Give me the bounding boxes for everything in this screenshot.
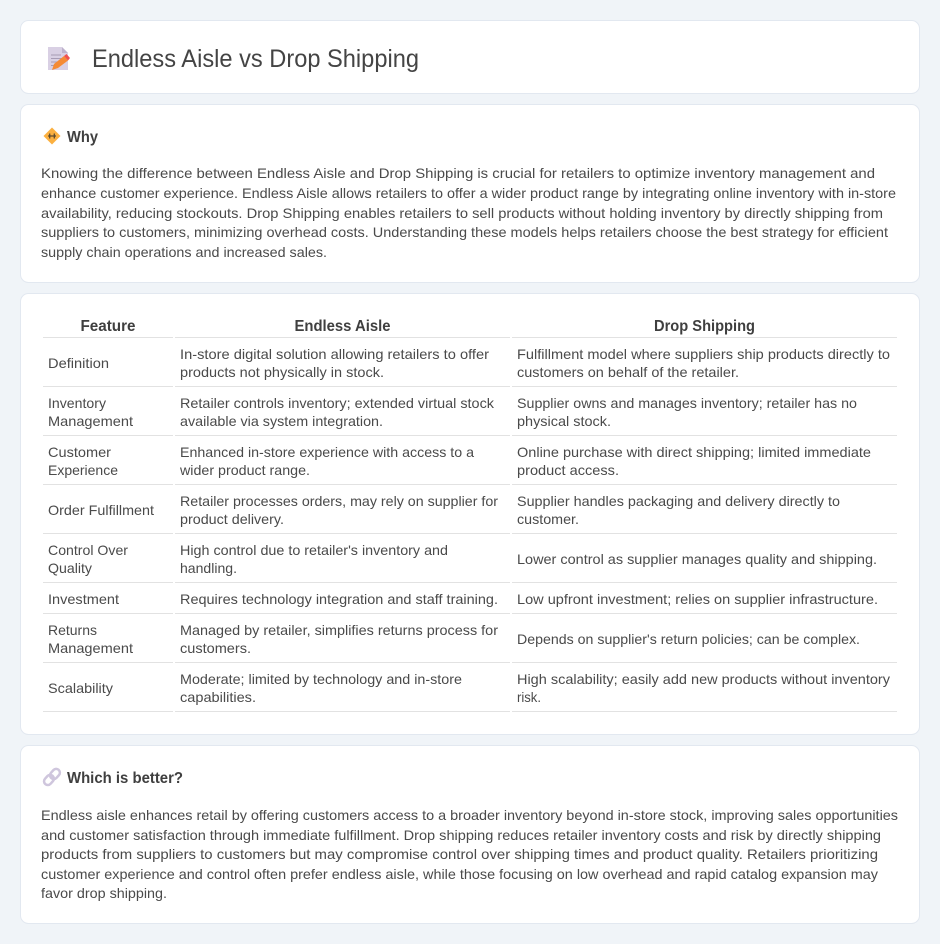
text: which is better paragraph: favor drop shipping. bbox=[41, 885, 167, 901]
icon: warning diamond bbox=[44, 128, 60, 144]
row: returns management: Managed by retailer, simplifies returns process for bbox=[180, 622, 498, 638]
text: why paragraph: supply chain operations and increased sales. bbox=[41, 244, 327, 260]
table header row: Drop Shipping bbox=[654, 318, 755, 335]
text: which is better paragraph: and customer satisfaction through immediate fulfillment. Drop shipping reduces retailer inventory costs and risk by directly shipping bbox=[41, 827, 881, 843]
row: inventory management: Management bbox=[48, 413, 133, 429]
panel: why bbox=[20, 104, 920, 282]
row: investment: Low upfront investment; relies on supplier infrastructure. bbox=[517, 591, 878, 607]
row: inventory management: available via system integration. bbox=[180, 413, 383, 429]
text: why paragraph: Knowing the difference between Endless Aisle and Drop Shipping is crucial for retailers to optimize inventory management and bbox=[41, 165, 875, 181]
panel: comparison table bbox=[20, 294, 920, 734]
text: which is better paragraph: products from suppliers to customers but may compromise control over shipping times and product quality. Retailers prioritizing bbox=[41, 846, 878, 862]
row: investment: Requires technology integration and staff training. bbox=[180, 591, 498, 607]
text: why paragraph: suppliers to customers, minimizing overhead costs. Understanding these models helps retailers choose the best strategy for efficient bbox=[41, 224, 888, 240]
row: inventory management: Inventory bbox=[48, 395, 106, 411]
row: customer experience: Online purchase with direct shipping; limited immediate bbox=[517, 444, 871, 460]
row: returns management bbox=[48, 622, 860, 656]
row: control over quality bbox=[48, 542, 877, 576]
row: returns management: customers. bbox=[180, 640, 251, 656]
row: scalability: High scalability; easily add new products without inventory bbox=[517, 671, 890, 687]
heading: which is better: Which is better? bbox=[67, 770, 183, 787]
row: order fulfillment: Order Fulfillment bbox=[48, 502, 154, 518]
row: investment bbox=[48, 591, 878, 607]
text: which is better paragraph: customer experience and control often prefer endless aisle, while those focusing on low overhead and rapid catalog expansion may bbox=[41, 866, 878, 882]
row: definition: customers on behalf of the retailer. bbox=[517, 364, 739, 380]
row: inventory management bbox=[48, 395, 857, 429]
text: which is better paragraph bbox=[41, 807, 898, 901]
row: inventory management: physical stock. bbox=[517, 413, 611, 429]
row: definition: products not physically in stock. bbox=[180, 364, 384, 380]
row: returns management: Depends on supplier's return policies; can be complex. bbox=[517, 631, 860, 647]
row: definition bbox=[48, 346, 890, 380]
row: order fulfillment: product delivery. bbox=[180, 511, 284, 527]
row: order fulfillment: customer. bbox=[517, 511, 579, 527]
row: customer experience: Experience bbox=[48, 462, 118, 478]
row: scalability bbox=[48, 671, 890, 705]
text: why paragraph: availability, reducing stockouts. Drop Shipping enables retailers to sell products without holding inventory by directly shipping from bbox=[41, 205, 883, 221]
icon: chain link bbox=[42, 767, 61, 787]
row: customer experience: Customer bbox=[48, 444, 111, 460]
text: which is better paragraph: Endless aisle enhances retail by offering customers access to a broader inventory beyond in-store stock, improving sales opportunities bbox=[41, 807, 898, 823]
row: investment: Investment bbox=[48, 591, 119, 607]
table header row bbox=[80, 318, 755, 335]
row: control over quality: Quality bbox=[48, 560, 92, 576]
row: customer experience: product access. bbox=[517, 462, 619, 478]
row: control over quality: Lower control as supplier manages quality and shipping. bbox=[517, 551, 877, 567]
row: order fulfillment: Supplier handles packaging and delivery directly to bbox=[517, 493, 840, 509]
row: definition: Definition bbox=[48, 355, 109, 371]
row: returns management: Returns bbox=[48, 622, 97, 638]
row: scalability: Scalability bbox=[48, 680, 113, 696]
heading: why: Why bbox=[67, 129, 98, 146]
row: definition: In-store digital solution allowing retailers to offer bbox=[180, 346, 489, 362]
panel: header bbox=[20, 20, 920, 94]
row: control over quality: High control due to retailer's inventory and bbox=[180, 542, 448, 558]
icon: memo with pencil bbox=[48, 47, 70, 70]
row: inventory management: Retailer controls inventory; extended virtual stock bbox=[180, 395, 495, 411]
row: scalability: risk. bbox=[517, 689, 541, 705]
row: customer experience: wider product range. bbox=[179, 462, 310, 478]
title: Endless Aisle vs Drop Shipping bbox=[92, 45, 419, 73]
row: definition: Fulfillment model where suppliers ship products directly to bbox=[517, 346, 890, 362]
panel: which is better bbox=[20, 746, 920, 924]
row: order fulfillment: Retailer processes orders, may rely on supplier for bbox=[180, 493, 498, 509]
row: control over quality: Control Over bbox=[48, 542, 128, 558]
text: why paragraph bbox=[41, 165, 896, 260]
row: control over quality: handling. bbox=[180, 560, 237, 576]
table header row: Endless Aisle bbox=[294, 318, 391, 335]
row: customer experience bbox=[48, 444, 871, 478]
row: customer experience: Enhanced in-store experience with access to a bbox=[180, 444, 474, 460]
text: why paragraph: enhance customer experience. Endless Aisle allows retailers to offer a wider product range by integrating online inventory with in-store bbox=[41, 185, 896, 201]
row: scalability: capabilities. bbox=[180, 689, 256, 705]
row: order fulfillment bbox=[48, 493, 840, 527]
row: inventory management: Supplier owns and manages inventory; retailer has no bbox=[517, 395, 857, 411]
row: scalability: Moderate; limited by technology and in-store bbox=[180, 671, 462, 687]
table header row: Feature bbox=[80, 318, 136, 335]
row: returns management: Management bbox=[48, 640, 133, 656]
